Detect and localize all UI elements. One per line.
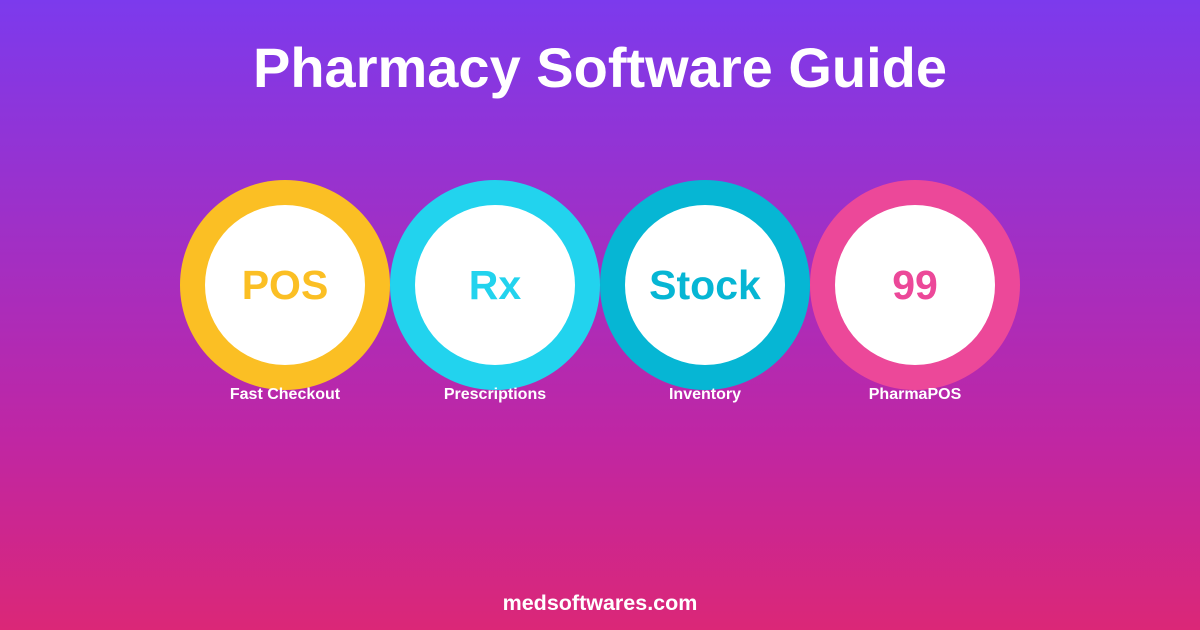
circle: 99: 99 (892, 262, 938, 308)
label: Fast Checkout: Fast Checkout (230, 386, 340, 403)
circle: Stock (600, 180, 810, 390)
circle: Rx (390, 180, 600, 390)
label: Prescriptions: Prescriptions (444, 386, 546, 403)
circle: 99 (810, 180, 1020, 390)
circle: POS: POS (242, 262, 328, 308)
circle: Stock: Stock (649, 262, 761, 308)
label: PharmaPOS: PharmaPOS (869, 386, 961, 403)
circle: POS (180, 180, 390, 390)
footer: medsoftwares.com (503, 591, 697, 615)
title: Pharmacy Software Guide (253, 36, 947, 99)
circle: Rx: Rx (469, 262, 521, 308)
label: Inventory: Inventory (669, 386, 741, 403)
